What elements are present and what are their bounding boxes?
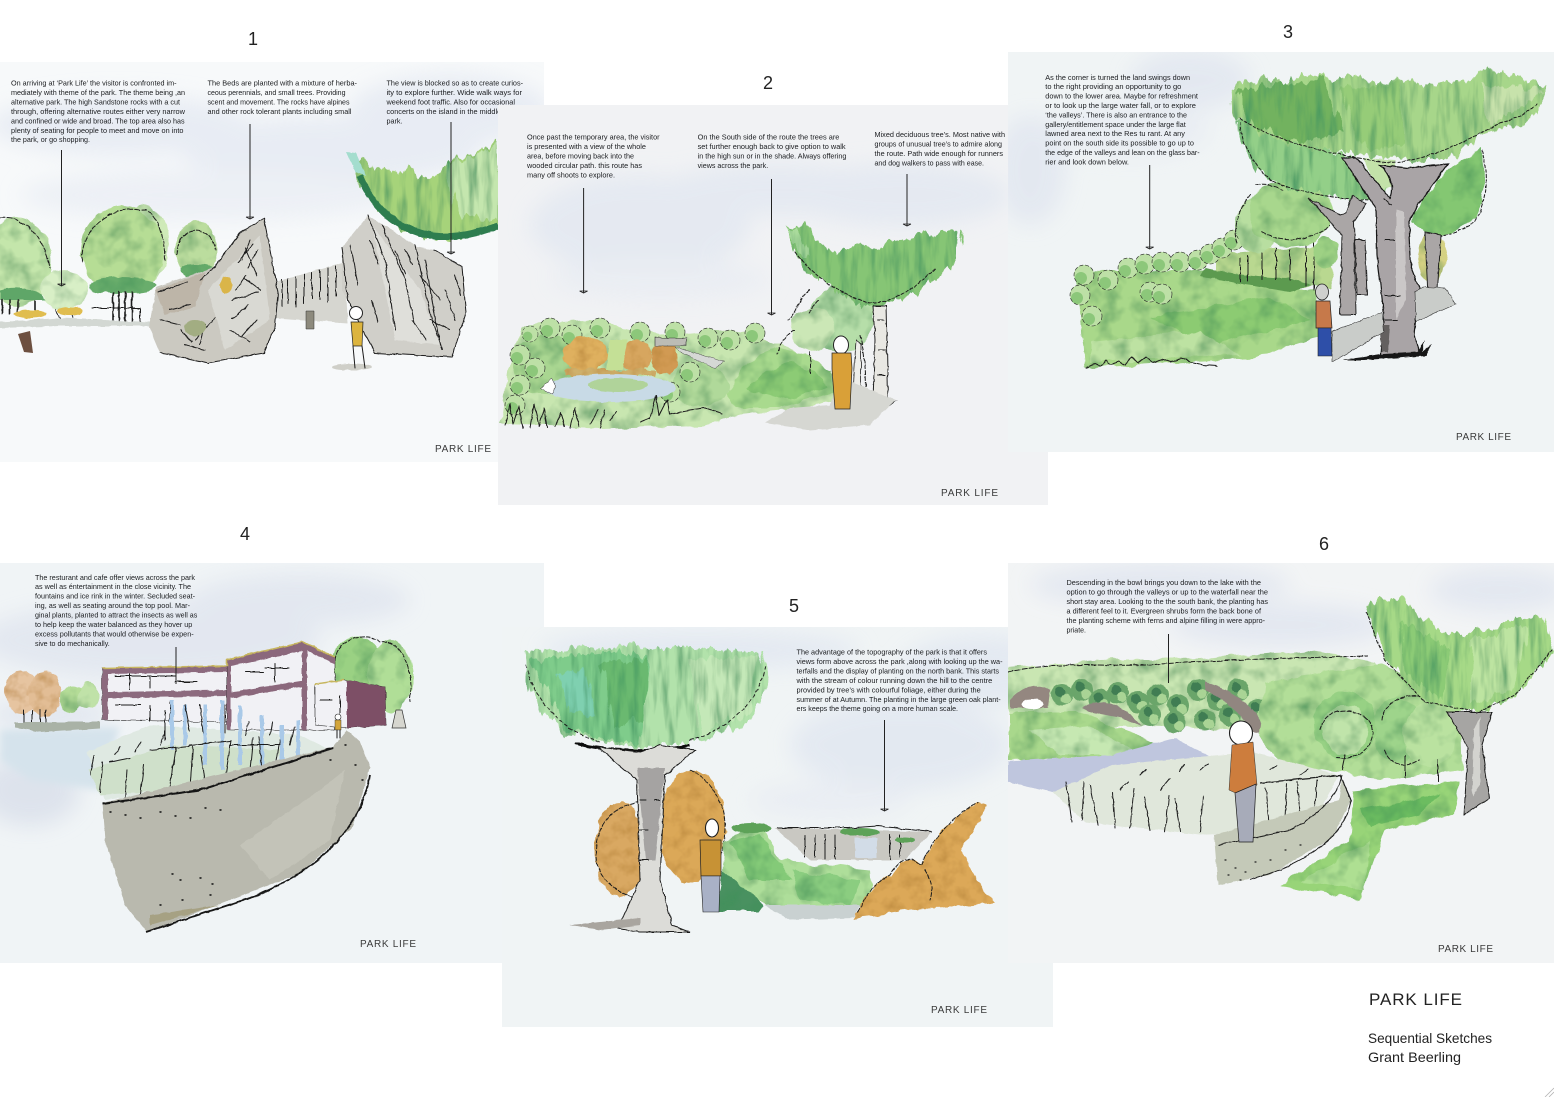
block right [315, 680, 386, 728]
text: option to go through the valleys or up to the waterfall near the [1066, 588, 1268, 597]
small tree outlines [1320, 696, 1432, 765]
text: to help keep the water balanced as they hover up [35, 620, 192, 629]
text: beds: scent and movement. The rocks have alpines [208, 97, 350, 106]
park life mark: PARK LIFE [931, 1005, 987, 1016]
left shrub [595, 802, 645, 898]
text: past temporary area: Once past the temporary area, the visitor [527, 133, 660, 142]
text: As the corner is turned the land swings down [1045, 73, 1190, 82]
right tree [1412, 148, 1485, 235]
root base [1340, 340, 1432, 360]
tree trunk [1447, 712, 1492, 815]
text: arrival: through, offering alternative routes either very narrow [11, 107, 186, 116]
person [700, 819, 721, 912]
text: ers keeps the theme going on a more human scale. [796, 704, 958, 713]
canopy [782, 222, 961, 305]
text: short stay area. Looking to the the south bank, the planting has [1066, 597, 1268, 606]
text: excess pollutants that would otherwise be expen- [35, 630, 194, 638]
text: south side [698, 133, 846, 170]
yellow planting [14, 307, 83, 318]
canopy outline [1366, 612, 1552, 712]
steps and path [655, 338, 725, 368]
text [795, 648, 1003, 713]
small trees [1323, 698, 1456, 767]
path [1214, 775, 1351, 885]
building [102, 642, 386, 730]
arrow [246, 124, 254, 219]
sky wash [1030, 563, 1554, 647]
number 3: 3 [1283, 22, 1293, 42]
canopy [1367, 598, 1554, 712]
text: south side: On the South side of the route the trees are [698, 133, 839, 142]
block middle [227, 642, 335, 730]
number 1: 1 [248, 29, 258, 49]
park life mark: PARK LIFE [941, 488, 998, 499]
text: the planting scheme with ferns and alpine filling in were appro- [1066, 616, 1266, 625]
top hedge [732, 823, 915, 843]
lawn [1076, 270, 1322, 368]
canopy outline [1240, 104, 1536, 162]
text: view: weekend foot traffic. Also for occasional [385, 97, 515, 106]
text: view: concerts on the island in the middle of the [386, 107, 522, 116]
right tree outline [335, 637, 411, 702]
gravel dots [1225, 845, 1301, 880]
back trunks [1308, 195, 1441, 315]
panel 4: restaurant and cafe [0, 563, 544, 963]
text: south side: set further enough back to give option to walk [698, 142, 846, 151]
text: ‘the valleys’. There is also an entrance to the [1045, 110, 1187, 119]
arrow line [175, 647, 177, 684]
text: deciduous trees: and dog walkers to pass with ease. [874, 158, 984, 167]
number 6: 6 [1319, 534, 1329, 554]
sky wash [994, 50, 1250, 225]
text: south side: in the high sun or in the shade. Always offering [698, 152, 846, 161]
text: terfalls and the display of planting on the north bank. This starts [796, 666, 999, 675]
small tree trunks [1342, 755, 1438, 782]
tree outlines [777, 290, 866, 395]
left trees base [0, 288, 46, 300]
sky wash [0, 574, 410, 826]
text: view: ity to explore further. Wide walk ways for [386, 88, 523, 97]
dark planting [715, 872, 765, 912]
text: view [385, 78, 524, 125]
canopy underside [360, 176, 498, 237]
hedge tops [1008, 656, 1368, 672]
panel 5: topography views [502, 627, 1060, 1027]
text: south side: views across the park. [698, 161, 768, 170]
tree trunk [853, 306, 898, 412]
hedge shrubs [505, 318, 765, 415]
text [1066, 578, 1268, 634]
text: summer of at Autumn. The planting in the large green oak plant- [796, 695, 1001, 704]
lake [540, 374, 676, 402]
orange planting [562, 337, 678, 376]
path [765, 380, 896, 430]
round tree [81, 206, 163, 295]
text: sive to do mechanically. [35, 639, 110, 648]
main trunk [1342, 158, 1448, 355]
panel 6: descending in the bowl [1008, 563, 1554, 963]
text: point on the south side its possible to go up to [1045, 139, 1194, 148]
canopy outline [526, 665, 766, 742]
text: with the stream of colour running down the hill to the centre [795, 676, 992, 685]
text: arrival: mediately with theme of the park. The theme being ,an [11, 88, 185, 97]
park life mark: PARK LIFE [360, 939, 416, 950]
person [1316, 284, 1332, 356]
text: arrival: the park, or go shopping. [11, 135, 90, 144]
reed strokes [1066, 764, 1317, 832]
valley [722, 825, 872, 912]
green roof [102, 642, 345, 684]
person [1229, 721, 1257, 842]
arrow [1146, 165, 1154, 249]
person [332, 306, 372, 370]
sky wash [538, 168, 998, 272]
right shrub [659, 769, 725, 883]
number 4: 4 [240, 524, 250, 544]
cliff [775, 826, 932, 860]
paved area [102, 730, 370, 932]
arrow [447, 122, 455, 254]
canopy underside [575, 743, 690, 751]
text: view: The view is blocked so as to create curios- [386, 78, 524, 88]
text: view: park. [386, 116, 402, 125]
mid tree outline [1236, 184, 1330, 245]
text: provided by tree’s with colourful foliage, either during the [796, 685, 981, 694]
text: ing, as well as seating around the top pool. Mar- [35, 601, 191, 610]
text: lawned area next to the Res tu rant. At any [1045, 129, 1185, 138]
park life mark: PARK LIFE [1438, 944, 1493, 955]
main canopy [1230, 66, 1548, 160]
mid trees [1236, 179, 1338, 267]
rock wall [275, 262, 348, 323]
water [0, 727, 120, 790]
arrow [903, 174, 911, 226]
small green trees [60, 682, 99, 712]
second canopy outline [1240, 122, 1372, 200]
text: deciduous trees: the route. Path wide enough for runners [874, 149, 1003, 158]
overhanging canopy [352, 142, 500, 238]
rock right [342, 215, 466, 357]
sky wash [540, 630, 1060, 818]
text: fountains and ice rink in the winter. Secluded seat- [35, 592, 196, 601]
text: past temporary area: is presented with a view of the whole [527, 142, 646, 151]
planting band [500, 320, 838, 428]
text: deciduous trees: groups of unusual tree’s to admire along [874, 139, 1002, 148]
person [832, 336, 852, 409]
second canopy [1240, 118, 1385, 200]
block middle frame [227, 642, 335, 730]
text: arrival: alternative park. The high Sandstone rocks with a cut [11, 97, 180, 106]
text: The resturant and cafe offer views across the park [35, 573, 195, 582]
orange trees [5, 670, 61, 716]
small tree [175, 221, 217, 279]
right tree trunk [392, 710, 406, 728]
trunks and seating [2, 292, 140, 322]
trunks and far bank [15, 710, 100, 732]
window marks [115, 664, 340, 722]
text: arrival [11, 78, 186, 144]
canopy underside [795, 252, 935, 303]
text: past temporary area [526, 133, 660, 180]
gap light [1362, 158, 1396, 190]
text: deciduous trees: Mixed deciduous tree’s. Most native with [874, 130, 1005, 139]
text: The advantage of the topography of the park is that it offers [796, 648, 987, 656]
dark evergreen shrubs [1051, 679, 1269, 733]
reeds and fountains [87, 700, 330, 800]
shrub row [1070, 222, 1256, 326]
reed bed [1053, 752, 1339, 835]
foreground grasses [505, 396, 722, 428]
arrow [768, 179, 776, 315]
text: views form above across the park ,along with looking up the wa- [796, 657, 1003, 666]
credits block [1368, 990, 1492, 1065]
right tree outline [1430, 150, 1486, 236]
text: or to look up the large water fall, or to explore [1045, 101, 1196, 110]
text: gallery/entitlement space under the large flat [1045, 120, 1186, 129]
small path [764, 905, 860, 920]
text: past temporary area: area, before moving back into the [527, 152, 634, 161]
trunk [598, 745, 695, 932]
back trees [790, 284, 874, 352]
text: the edge of the valleys and lean on the glass bar- [1045, 148, 1200, 157]
text [1045, 73, 1200, 166]
tree outlines [0, 209, 216, 268]
text: down to the lower area. Maybe for refreshment [1045, 92, 1198, 101]
park life mark: PARK LIFE [435, 444, 491, 455]
text: past temporary area: wooded circular path. this route has [526, 161, 642, 170]
text: beds [208, 78, 358, 116]
water [1008, 738, 1225, 792]
rock left [149, 218, 278, 363]
text: to the right providing an opportunity to go [1045, 82, 1181, 91]
park life title: PARK LIFE [1369, 990, 1462, 1009]
foreground grass [1086, 357, 1217, 368]
sky wash [0, 74, 550, 221]
shrub outlines [596, 770, 725, 898]
brown post [18, 331, 33, 353]
left lawn [1008, 712, 1175, 760]
arrow [880, 720, 888, 811]
block left frame [102, 666, 227, 720]
lower lawn [1280, 782, 1460, 900]
background planting [1215, 234, 1446, 288]
grass strip between beds [606, 340, 628, 370]
text: beds: and other rock tolerant plants including small [208, 107, 352, 116]
right trees [332, 637, 413, 712]
text: past temporary area: many off shoots to explore. [527, 170, 615, 180]
panel 2: view across the park [498, 105, 1048, 505]
distant figures [306, 311, 314, 329]
right hillside [1258, 665, 1462, 780]
block right dark wall [347, 680, 386, 728]
text: ginal plants, planted to attract the insects as well as [35, 611, 198, 620]
text: arrival: and confined or wide and broad. The top area also has [11, 116, 185, 125]
panel 3: corner turn [994, 50, 1554, 452]
text: Descending in the bowl brings you down to the lake with the [1066, 578, 1261, 587]
text [35, 573, 198, 648]
text: beds: ceous perennials, and small trees. Providing [208, 88, 346, 97]
text: arrival: On arriving at ‘Park Life’ the visitor is confronted im- [11, 78, 177, 88]
block left [102, 666, 227, 722]
left trees [0, 218, 88, 310]
path [1332, 287, 1456, 362]
subtitle: Sequential Sketches [1368, 1030, 1492, 1046]
hill [725, 348, 835, 408]
text: a different feel to it. Evergreen shrubs form the back bone of [1066, 606, 1262, 616]
ground shadow [0, 318, 150, 328]
panel 1: arrival at Park Life [0, 62, 550, 462]
text: as well as éntertainment in the close vicinity. The [35, 582, 191, 591]
arrow [58, 150, 66, 286]
back tree [136, 204, 169, 281]
bank outline [858, 802, 977, 912]
person [335, 714, 341, 738]
text: priate. [1066, 625, 1086, 634]
text: deciduous trees [874, 130, 1005, 167]
path edge lines [102, 748, 370, 932]
arrow line [1168, 634, 1170, 683]
text: arrival: plenty of seating for people to meet and move on into [11, 126, 183, 135]
back small trunks [1240, 236, 1314, 290]
park life mark: PARK LIFE [1456, 432, 1511, 443]
number 5: 5 [789, 596, 799, 616]
hedge band [1008, 650, 1380, 730]
number 2: 2 [763, 73, 773, 93]
main canopy [525, 644, 767, 748]
text: beds: The Beds are planted with a mixture of herba- [208, 78, 358, 88]
canopy teal tip [346, 152, 366, 176]
dark planting base [1200, 268, 1312, 292]
text: rier and look down below. [1045, 157, 1129, 166]
arrow [580, 188, 588, 293]
tree shadow [570, 918, 640, 930]
author: Grant Beerling [1368, 1049, 1461, 1065]
gravel dots [110, 745, 363, 905]
right orange bank [854, 802, 995, 918]
corner resize mark [1545, 1088, 1554, 1097]
rock arches [1010, 682, 1270, 735]
